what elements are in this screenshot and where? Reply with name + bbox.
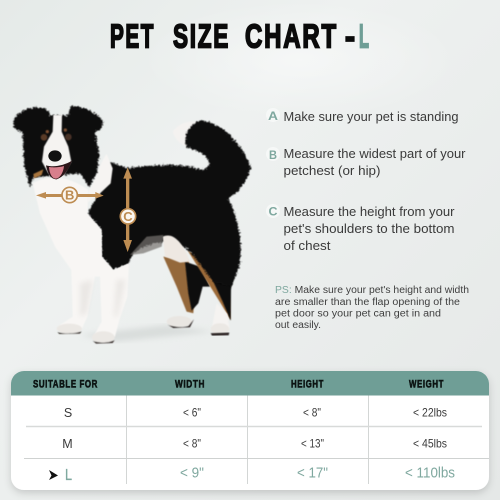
PS note [275, 285, 469, 331]
title: - [345, 18, 355, 54]
title: PET [110, 18, 155, 54]
title [110, 18, 369, 54]
table grid lines [24, 396, 489, 484]
title: CHART [245, 18, 338, 54]
row S: S [64, 406, 72, 420]
row S: < 22lbs [413, 406, 447, 420]
eyes and eyebrows [41, 128, 72, 141]
white chest and front legs [33, 178, 129, 337]
instruction C [266, 204, 455, 253]
row L highlighted: < 110lbs [405, 464, 455, 482]
row L highlighted: < 17" [297, 464, 328, 482]
row L highlighted: < 9" [180, 464, 204, 482]
row M: M [62, 437, 73, 451]
row S: < 8" [303, 406, 321, 420]
nose [48, 150, 62, 162]
PS note: pet door so your pet can get in and [275, 308, 441, 320]
table header labels: HEIGHT [291, 378, 324, 390]
table header labels: WIDTH [175, 378, 205, 390]
row M [62, 436, 447, 451]
instruction C: pet's shoulders to the bottom [284, 221, 454, 236]
instruction B [266, 146, 466, 178]
instruction A: A [268, 109, 278, 123]
dog head [13, 106, 103, 187]
row L highlighted [49, 464, 455, 484]
size table [11, 371, 489, 490]
pointer icon [49, 470, 58, 480]
table header labels: SUITABLE FOR [33, 378, 98, 390]
measure arrow C: C [123, 209, 133, 224]
floor shadow [80, 325, 213, 342]
instruction B: Measure the widest part of your [284, 146, 466, 161]
measure arrow C [120, 167, 136, 252]
text: L [359, 18, 369, 54]
PS note: out easily. [275, 320, 321, 331]
PS note: are smaller than the flap opening of the [275, 297, 460, 308]
PS note: PS: Make sure your pet's height and width [275, 285, 469, 296]
instruction B: B [269, 148, 277, 162]
instruction C: C [268, 204, 278, 218]
row M: < 13" [301, 436, 324, 450]
tail tip [173, 121, 200, 147]
row M: < 8" [183, 436, 201, 450]
front paws [57, 324, 115, 344]
table header band [11, 371, 489, 396]
instruction C: Measure the height from your [284, 204, 455, 219]
row S [64, 406, 447, 420]
instruction A: Make sure your pet is standing [284, 109, 458, 124]
table header labels [33, 378, 444, 390]
instruction C: of chest [284, 238, 331, 253]
belly white patch [163, 235, 190, 263]
measure arrow B: B [65, 188, 74, 203]
rear legs tan and black [163, 250, 233, 336]
title: SIZE [173, 18, 230, 54]
white blaze and muzzle [42, 115, 71, 179]
table header labels: WEIGHT [409, 378, 444, 390]
instruction B: petchest (or hip) [284, 163, 380, 178]
measure arrow B [36, 187, 104, 203]
row S: < 6" [183, 406, 201, 420]
dog photo [13, 106, 251, 344]
black body and tail [87, 121, 251, 287]
mouth and tongue [46, 161, 72, 179]
row M: < 45lbs [413, 436, 447, 450]
chest and leg shading [80, 280, 125, 317]
row L highlighted: L [65, 467, 72, 484]
table card [11, 371, 489, 490]
